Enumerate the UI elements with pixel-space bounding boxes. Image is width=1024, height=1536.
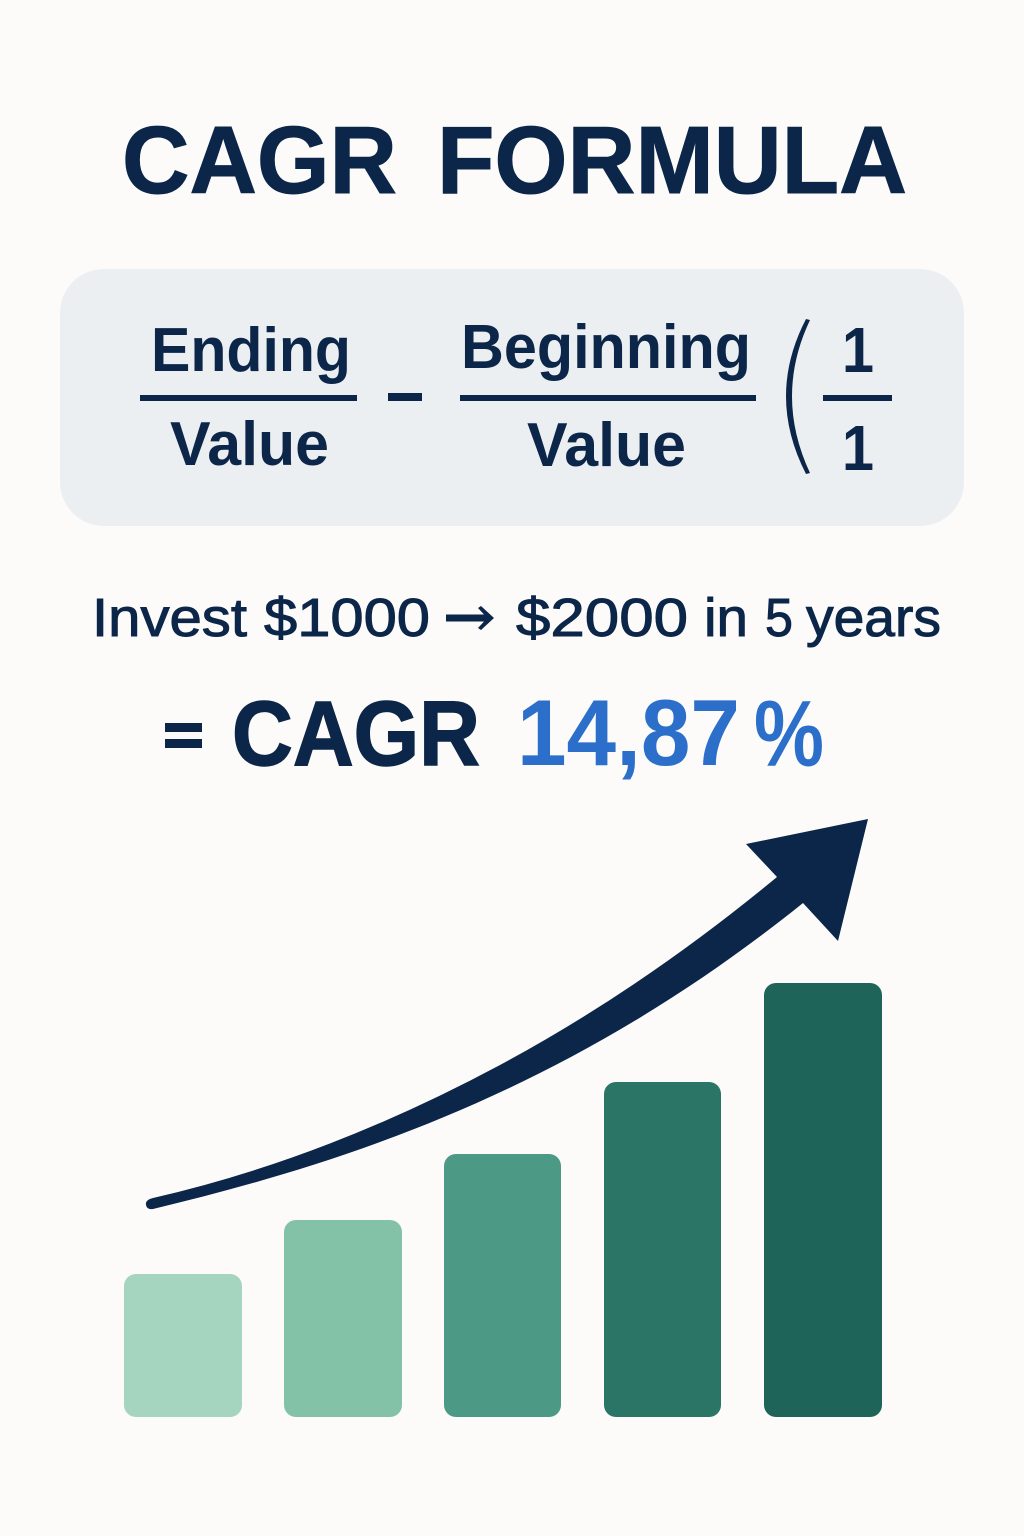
CAGR label: CAGR [232,683,480,785]
minus sign [388,393,422,401]
fraction: one over one: 1 [842,314,874,386]
result line [165,680,824,786]
opening parenthesis [786,319,810,474]
bar 2 [284,1220,402,1417]
fraction: ending value: Ending [151,316,351,385]
panel: formula [60,269,964,526]
title: CAGR [122,107,397,214]
title: FORMULA [437,107,907,214]
example text line: in [704,588,748,648]
example text line: 5 [765,588,793,648]
title [122,107,907,214]
icon: small arrow [446,606,494,630]
example text line: years [806,588,941,648]
growth arrow [146,819,868,1209]
fraction: ending value: Value [170,410,329,479]
equals sign [165,723,202,748]
bar 4 [604,1082,721,1417]
example text line: Invest [92,588,247,648]
bar chart [124,983,882,1417]
fraction: beginning value: Beginning [461,313,751,382]
fraction: ending value [140,316,357,479]
bar 3 [444,1154,561,1417]
fraction: beginning value [460,313,756,480]
CAGR value: % [754,681,824,786]
fraction: one over one: 1 [842,412,874,484]
bar 1 [124,1274,242,1417]
bar 5 [764,983,882,1417]
example text line: $2000 [516,588,688,648]
example text line [92,588,941,648]
CAGR value: 14,87 [517,680,740,785]
fraction: beginning value: Value [527,411,686,480]
fraction: one over one [823,314,892,484]
example text line: $1000 [264,588,430,648]
